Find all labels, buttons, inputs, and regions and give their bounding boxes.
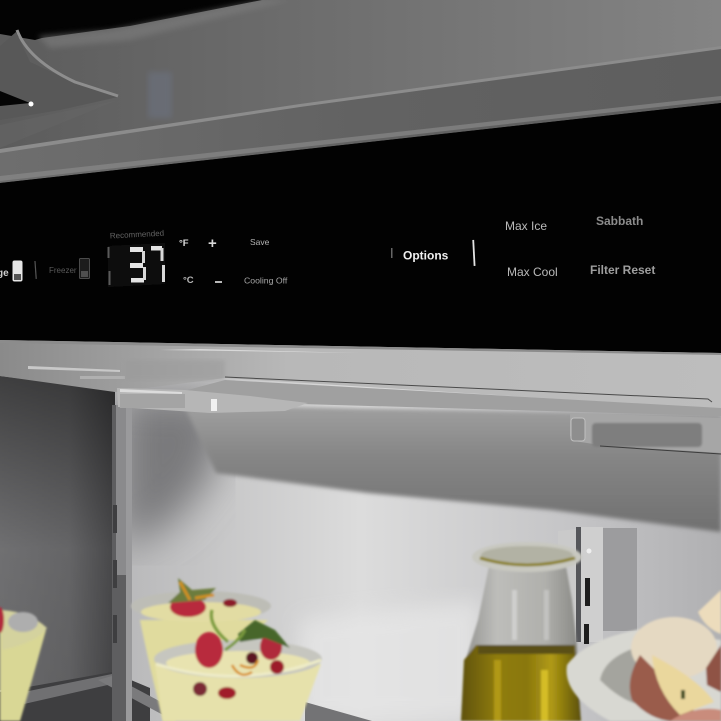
black control panel	[0, 103, 721, 353]
dessert glass back	[131, 578, 271, 721]
label: Max Cool: Max Cool	[507, 265, 558, 279]
upper housing	[0, 0, 721, 183]
label: Options: Options	[403, 248, 449, 262]
label: Max Ice: Max Ice	[505, 219, 547, 233]
label: degrees C: °C	[183, 275, 194, 286]
left side wall	[0, 376, 165, 721]
oil bottle	[461, 542, 582, 721]
dessert glass front	[154, 610, 322, 721]
silver trim below panel	[0, 340, 721, 416]
label: Save: Save	[250, 237, 270, 247]
temperature display: 37	[108, 243, 165, 287]
shelf rail right	[558, 527, 637, 644]
label: Sabbath: Sabbath	[596, 214, 643, 228]
icon: minus	[215, 281, 222, 283]
shelf bracket left	[117, 388, 308, 413]
back wall of refrigerator	[0, 370, 721, 721]
vertical shelf rail left	[112, 405, 132, 721]
right control group	[391, 214, 655, 279]
label: Recommended: Recommended	[110, 229, 164, 240]
shelf tab right	[570, 413, 721, 454]
bottom shelf edge	[305, 702, 372, 721]
icon: door indicator light	[12, 260, 22, 282]
plate of potatoes	[567, 590, 721, 721]
left control group	[0, 229, 288, 287]
dessert glass far left	[0, 607, 47, 721]
label: Cooling Off: Cooling Off	[244, 276, 288, 286]
label: Freezer: Freezer	[49, 266, 77, 275]
icon: freezer door	[80, 258, 90, 278]
label: Filter Reset: Filter Reset	[590, 263, 655, 277]
icon: plus: +	[208, 235, 217, 252]
label: degrees F: °F	[179, 238, 189, 249]
